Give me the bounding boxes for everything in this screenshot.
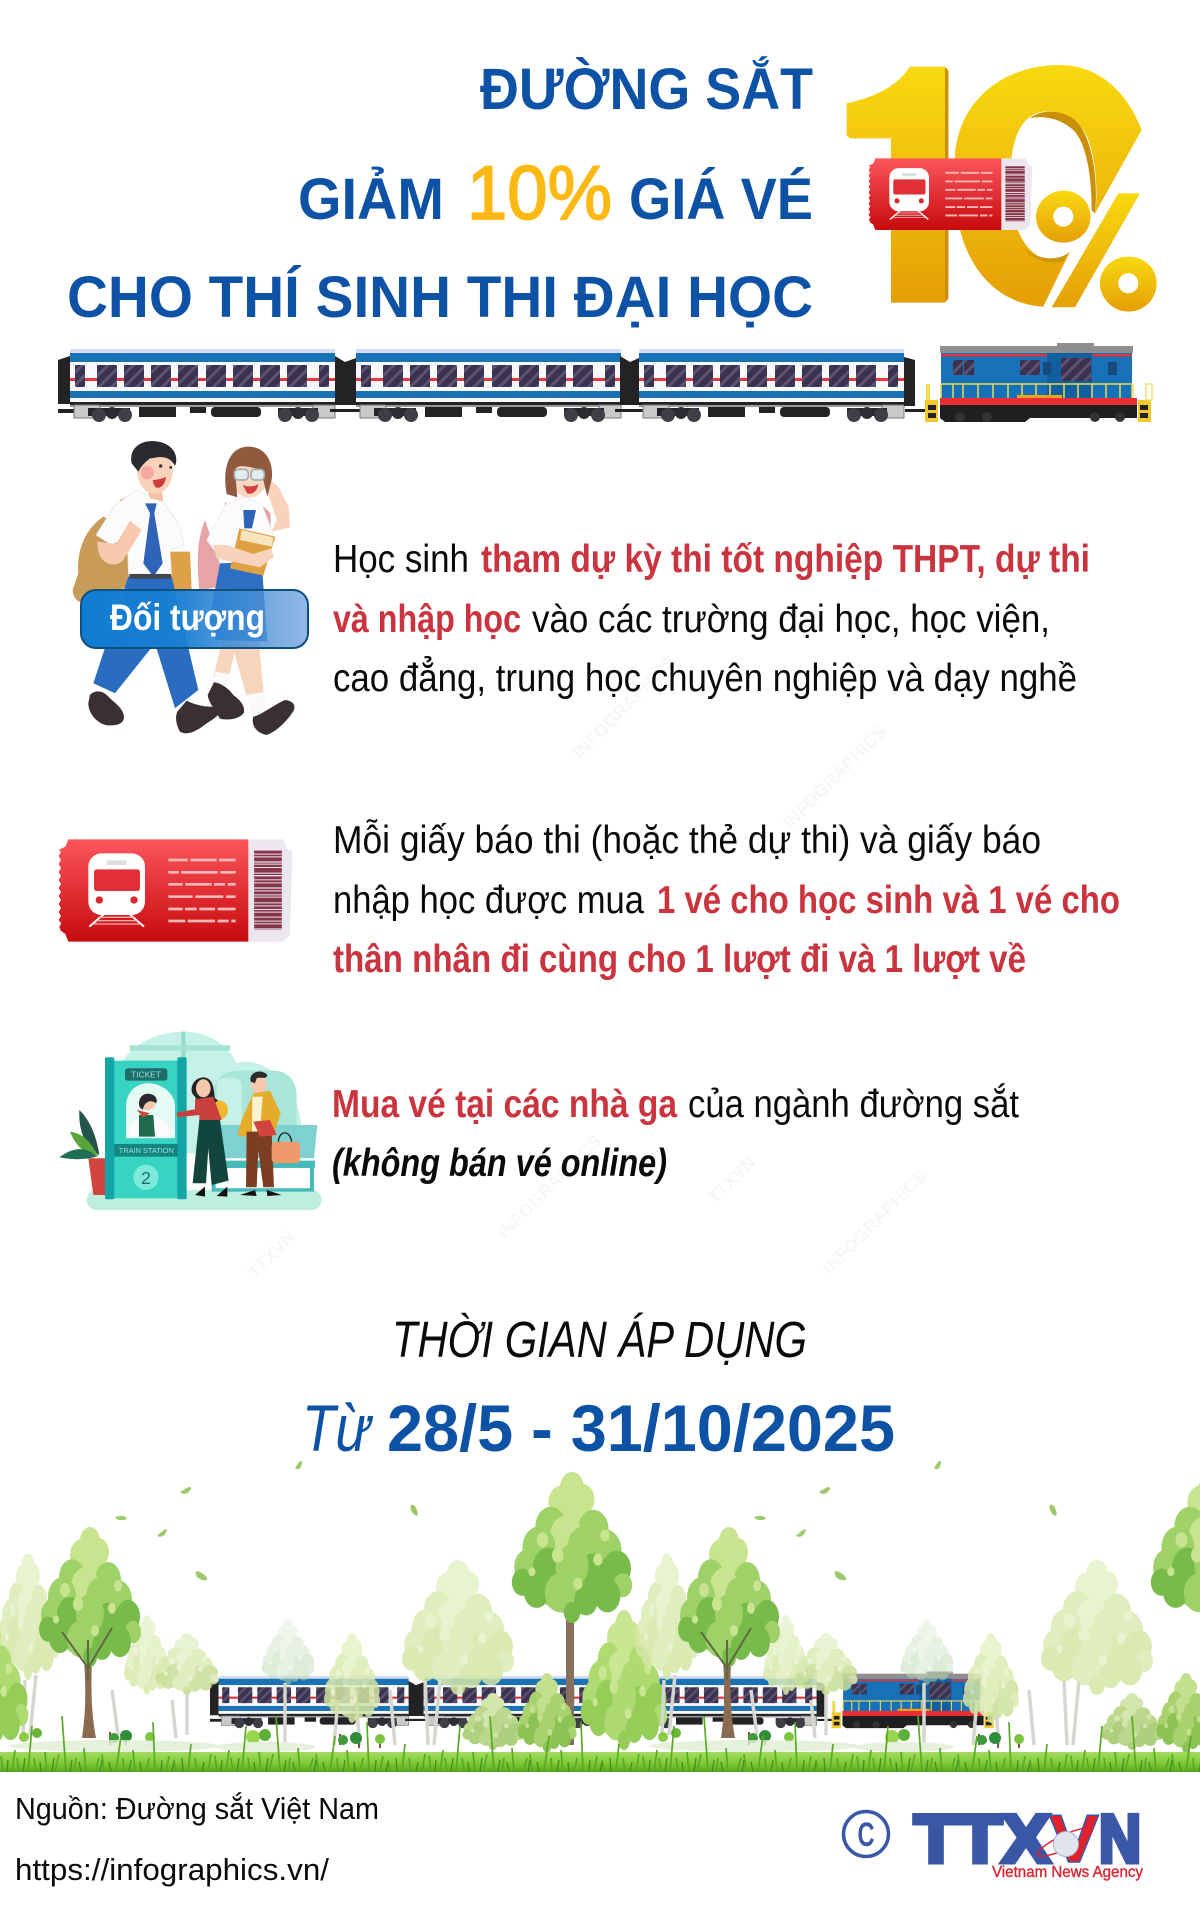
text block: quy định vé: nhập học được mua (333, 879, 644, 922)
pale tree D (324, 1633, 380, 1723)
boy head (147, 487, 163, 502)
boy backpack (73, 495, 140, 602)
man (251, 1073, 267, 1093)
ground patches (10, 1740, 220, 1752)
text block: mua vé: (không bán vé online) (332, 1142, 667, 1185)
watermark: TTXVN (704, 1152, 760, 1208)
badge: Đối tượng (81, 590, 308, 648)
icon: copyright (844, 1812, 888, 1856)
girl shoes (208, 682, 294, 735)
boy trousers (93, 577, 198, 708)
text block: đối tượng (333, 538, 1090, 700)
text block: quy định vé: thân nhân đi cùng cho 1 lượt đi và 1 lượt về (333, 938, 1026, 981)
tree 1 crown (39, 1527, 141, 1667)
boy arm (97, 521, 142, 565)
girl socks (213, 672, 267, 716)
tree 1 trunk (82, 1660, 96, 1738)
girl head (230, 452, 268, 498)
girl arm (213, 545, 274, 567)
badge: Đối tượng: Đối tượng (110, 597, 265, 638)
watermark (244, 651, 930, 1283)
clerk (128, 1115, 175, 1137)
illustration: students (73, 441, 294, 735)
woman (192, 1077, 222, 1107)
date range: Từ (302, 1391, 373, 1465)
illustration: train (58, 343, 1152, 422)
boy shirt (96, 490, 184, 574)
logo: TTXVN: N (1099, 1801, 1141, 1877)
text block: đối tượng: vào các trường đại học, học viện, (532, 598, 1050, 641)
bush G (517, 1673, 577, 1753)
title (67, 57, 813, 330)
text block: đối tượng: cao đẳng, trung học chuyên nghiệp và dạy nghề (333, 656, 1077, 700)
tree 2 crown (512, 1472, 632, 1623)
sign TRAIN STATION (114, 1144, 178, 1157)
watermark: INFOGRAPHICS (819, 1166, 930, 1278)
sign TICKET: TICKET (131, 1069, 161, 1079)
grass band (0, 1712, 1200, 1772)
tiny cone trees (110, 1732, 380, 1748)
luggage (272, 1142, 300, 1163)
text block: quy định vé: Mỗi giấy báo thi (hoặc thẻ dự thi) và giấy báo (333, 819, 1041, 862)
boy book (170, 552, 192, 590)
date range: 28/5 - 31/10/2025 (387, 1391, 895, 1465)
bush F (462, 1693, 524, 1750)
title: ĐƯỜNG SẮT (480, 57, 813, 122)
watermark: TTXVN (244, 1227, 300, 1283)
bench (220, 1125, 317, 1158)
sign TICKET (125, 1068, 167, 1081)
pale tree A (0, 1553, 60, 1680)
logo: TTXVN: V (1049, 1801, 1099, 1877)
title: 10% (467, 151, 612, 236)
logo: TTXVN: TTX (914, 1801, 1050, 1877)
heading: thời gian áp dụng: THỜI GIAN ÁP DỤNG (392, 1311, 807, 1368)
girl shirt (207, 497, 274, 563)
text block: quy định vé (333, 819, 1120, 981)
text block: mua vé (332, 1083, 1019, 1185)
text block: mua vé: của ngành đường sắt (688, 1083, 1019, 1126)
text block: mua vé: Mua vé tại các nhà ga (332, 1083, 677, 1126)
title: CHO THÍ SINH THI ĐẠI HỌC (67, 265, 813, 330)
trunks pale (23, 1675, 440, 1745)
logo: TTXVN: Vietnam News Agency (992, 1864, 1143, 1881)
pale tree E (402, 1560, 514, 1695)
boy shoes (88, 691, 222, 733)
girl book (230, 528, 275, 576)
text block: đối tượng: tham dự kỳ thi tốt nghiệp THPT, dự thi (481, 538, 1090, 581)
illustration: small train among trees (210, 1672, 994, 1728)
boy tie (143, 503, 163, 577)
tree 2 trunk (566, 1615, 574, 1745)
text block: quy định vé: 1 vé cho học sinh và 1 vé cho (657, 879, 1120, 922)
text block: đối tượng: và nhập học (333, 598, 521, 641)
leaves (115, 1461, 418, 1580)
watermark: INFOGRAPHICS (494, 1131, 605, 1243)
title: GIÁ VÉ (629, 167, 813, 232)
booth (108, 1061, 183, 1198)
footer source: https://infographics.vn/ (15, 1852, 329, 1887)
illustration: train station ticket booth (59, 1032, 322, 1210)
faded tree C (261, 1620, 315, 1685)
icon: copyright: C (858, 1816, 874, 1854)
dome backdrop (110, 1032, 303, 1153)
girl legs (213, 637, 264, 697)
sign TRAIN STATION: TRAIN STATION (119, 1148, 174, 1155)
footer source: Nguồn: Đường sắt Việt Nam (15, 1791, 379, 1826)
girl skirt (210, 562, 267, 642)
watermark: INFOGRAPHICS (569, 651, 680, 763)
counter number (133, 1165, 159, 1190)
title: GIẢM (298, 167, 444, 232)
boy belt (129, 574, 171, 579)
counter number: 2 (141, 1168, 151, 1188)
girl tie (243, 510, 256, 528)
icon: golden 10% (847, 65, 1157, 312)
icon: red ticket on 10% (869, 158, 1032, 230)
illustration: trees landscape (0, 1461, 1200, 1753)
watermark: INFOGRAPHICS (779, 721, 890, 833)
text block: đối tượng: Học sinh (333, 538, 469, 581)
girl backpack (198, 502, 271, 590)
footer source (15, 1791, 379, 1887)
potted plant (88, 1158, 106, 1195)
pale tree B (124, 1615, 170, 1695)
icon: large ticket (59, 839, 292, 942)
tree 2b (581, 1610, 667, 1750)
floor (87, 1190, 322, 1210)
logo: TTXVN (914, 1801, 1143, 1881)
girl raised arm (268, 480, 290, 532)
